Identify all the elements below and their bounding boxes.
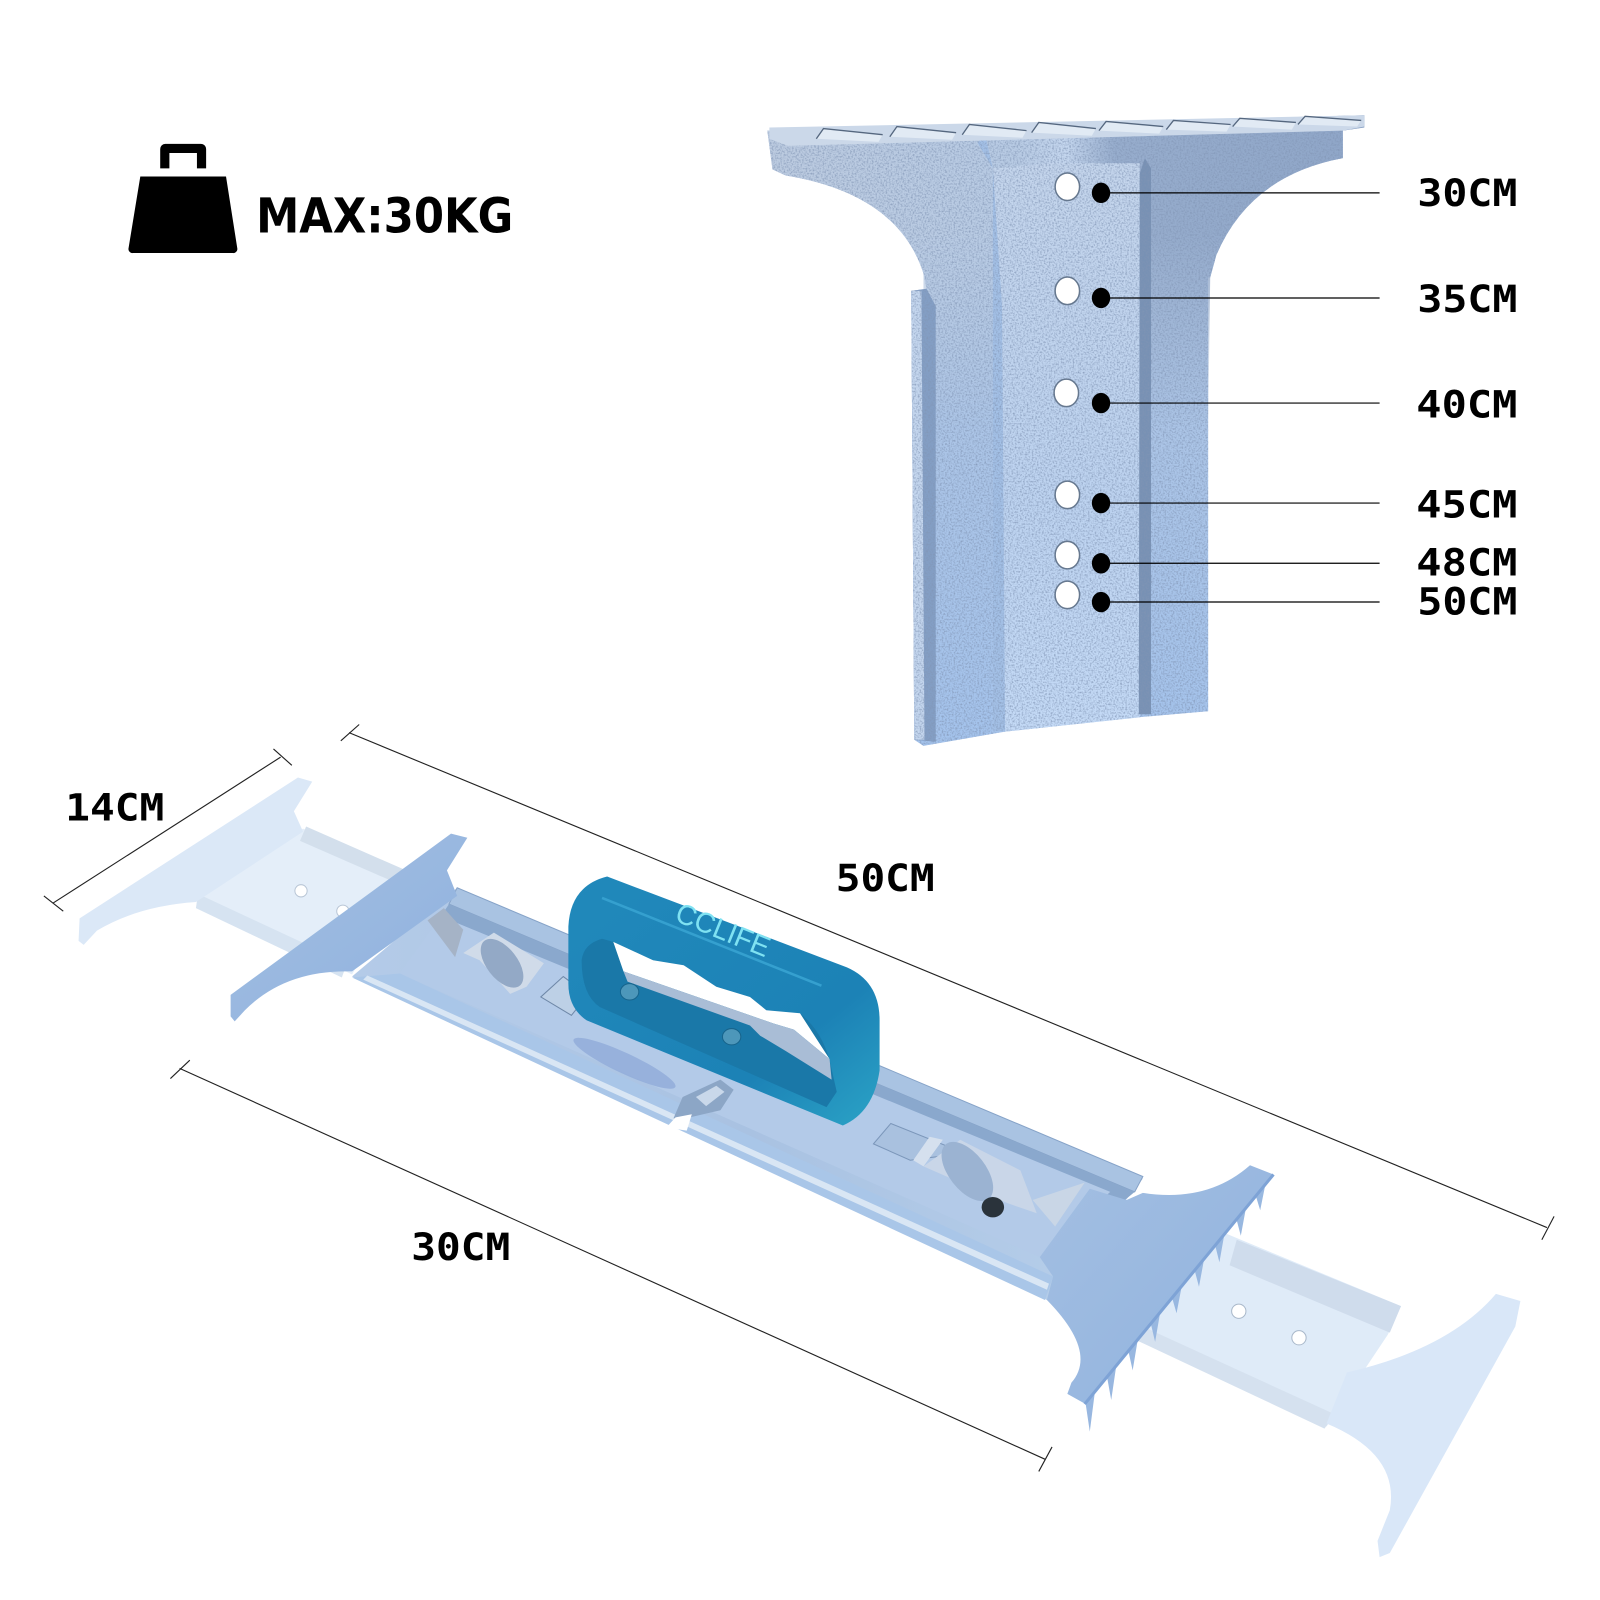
faded left end plate	[79, 778, 312, 945]
hole 35cm	[1055, 277, 1080, 305]
hole 48cm	[1055, 541, 1080, 569]
dimension: 50CM extended length: 50CM	[836, 856, 935, 900]
callout: 40CM: 40CM	[1416, 382, 1517, 426]
handle rivet right	[722, 1029, 741, 1045]
plate body	[767, 115, 1364, 746]
callout: 30CM	[1092, 171, 1517, 215]
handle outer shape	[568, 877, 880, 1126]
handle inner wall	[582, 939, 837, 1107]
rail crimp highlight	[696, 1086, 724, 1106]
dimension: 14CM width: 14CM	[65, 785, 164, 829]
metal texture	[765, 112, 1367, 750]
callout: 35CM: 35CM	[1417, 277, 1517, 321]
handle rivet left	[620, 984, 639, 1000]
dimension: 14CM width	[44, 749, 292, 911]
right spring clip	[873, 1123, 1085, 1227]
callout: 35CM	[1092, 277, 1517, 321]
panel: end plate close-up	[765, 112, 1367, 750]
callout: 45CM	[1092, 482, 1517, 526]
callout: 48CM: 48CM	[1416, 541, 1517, 585]
hole 30cm	[1055, 173, 1080, 201]
hole 40cm	[1054, 379, 1079, 407]
right groove	[1139, 158, 1151, 714]
right rail holes	[1232, 1304, 1306, 1345]
callout: 48CM	[1092, 541, 1517, 585]
right rail extension	[1128, 1224, 1401, 1427]
plate head shading	[767, 115, 1364, 429]
faded right end plate	[1327, 1294, 1520, 1557]
plate top lip	[769, 115, 1364, 146]
hole 50cm	[1055, 581, 1080, 609]
heading: max load: MAX:30KG	[256, 189, 513, 245]
right rail upper lip	[1230, 1240, 1401, 1333]
blue left end plate	[231, 834, 467, 1021]
dimension: 30CM closed length: 30CM	[411, 1225, 510, 1269]
left groove highlight	[911, 291, 924, 740]
callout: 40CM	[1092, 382, 1517, 426]
blue plate edge fold	[1085, 1174, 1273, 1404]
dimension: 50CM extended length	[341, 724, 1554, 1240]
left spring clip	[428, 908, 588, 1015]
panel: tile lifter product	[79, 778, 1520, 1557]
handle	[568, 877, 880, 1126]
rail lower lip	[352, 973, 1053, 1300]
callout: 45CM: 45CM	[1416, 482, 1517, 526]
callout: 50CM	[1092, 579, 1517, 623]
handle edge highlight	[602, 898, 821, 986]
callout: 30CM: 30CM	[1417, 171, 1517, 215]
rail upper inner strip	[441, 904, 1135, 1202]
rail upper lip	[449, 888, 1143, 1192]
callout: 50CM: 50CM	[1417, 579, 1517, 623]
rail gap	[666, 1114, 692, 1131]
handle brand text: CCLIFE	[671, 897, 775, 964]
main rail body	[352, 888, 1143, 1300]
blue right end plate	[1040, 1165, 1273, 1432]
metal seen through handle	[623, 971, 832, 1080]
centre panel	[993, 163, 1140, 732]
left groove	[911, 289, 936, 742]
plate lip notches	[816, 116, 1361, 142]
hole 45cm	[1055, 481, 1080, 509]
faded left rail extension	[196, 827, 408, 978]
handle opening	[613, 942, 830, 1059]
icon: weight	[128, 144, 237, 253]
dimension: 30CM closed length	[170, 1060, 1052, 1471]
rail crimp joint	[673, 1080, 734, 1118]
rail shadow streak	[569, 1030, 680, 1096]
right rail lower lip	[1138, 1327, 1335, 1429]
centre fold	[978, 133, 1005, 732]
rail centre channel	[400, 916, 1110, 1257]
rail lower highlight	[363, 976, 1049, 1290]
